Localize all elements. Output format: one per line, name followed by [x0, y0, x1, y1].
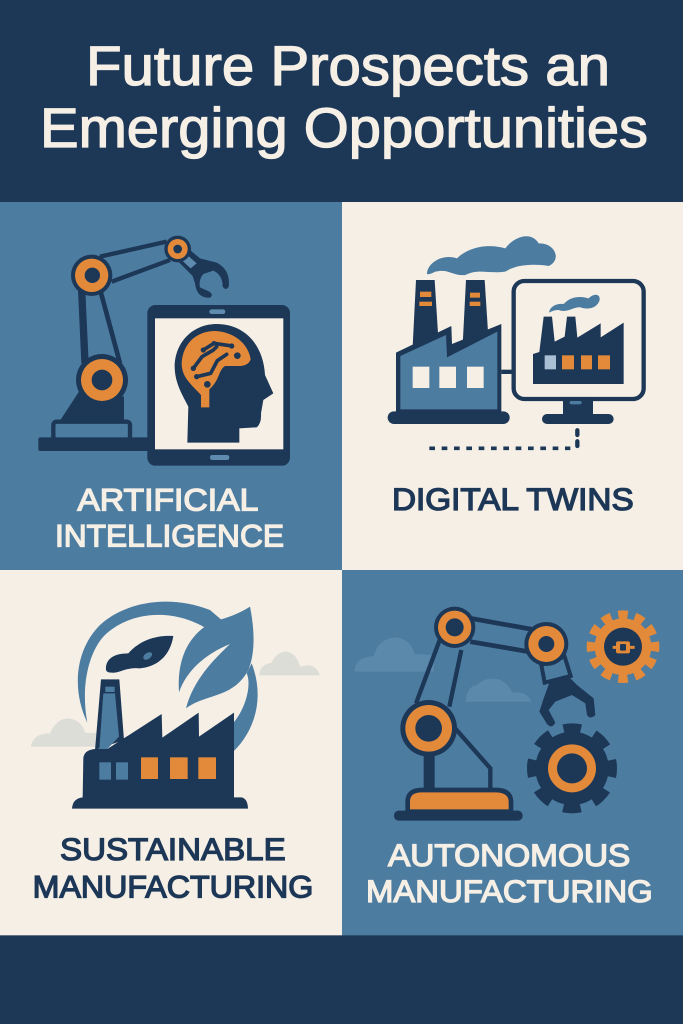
label: artificial intelligence: ARTIFICIAL: [77, 483, 258, 518]
icon: clouds: [355, 637, 531, 702]
label: autonomous manufacturing: [366, 838, 653, 909]
panel: sustainable manufacturing: [0, 570, 342, 935]
panel: autonomous manufacturing: [342, 570, 683, 935]
label: digital twins: DIGITAL TWINS: [392, 482, 634, 517]
icon: clouds: [31, 652, 320, 747]
title: Emerging Opportunities: [40, 96, 648, 159]
label: autonomous manufacturing: MANUFACTURING: [366, 874, 653, 909]
dotted connector: [429, 430, 577, 448]
title: Future Prospects an: [86, 34, 610, 97]
label: sustainable manufacturing: MANUFACTURING: [33, 869, 313, 904]
icon: navy gear: [533, 729, 611, 808]
icon: robot arm: [394, 607, 595, 821]
label: autonomous manufacturing: AUTONOMOUS: [388, 838, 630, 873]
label: sustainable manufacturing: SUSTAINABLE: [60, 832, 286, 867]
icon: factory: [72, 679, 248, 809]
label: artificial intelligence: INTELLIGENCE: [55, 519, 284, 554]
icon: orange gear: [591, 615, 655, 679]
panel: digital twins: [342, 202, 683, 570]
icon: factory: [388, 236, 556, 424]
title: [40, 34, 648, 159]
icon: monitor with digital twin: [514, 281, 644, 424]
label: sustainable manufacturing: [33, 832, 313, 904]
label: artificial intelligence: [55, 483, 284, 554]
icon: robot arm: [38, 236, 229, 451]
icon: ring and leaf: [78, 602, 258, 752]
icon: smoke: [106, 636, 173, 673]
icon: tablet with AI head: [147, 305, 290, 466]
panel: artificial intelligence: [0, 202, 342, 570]
